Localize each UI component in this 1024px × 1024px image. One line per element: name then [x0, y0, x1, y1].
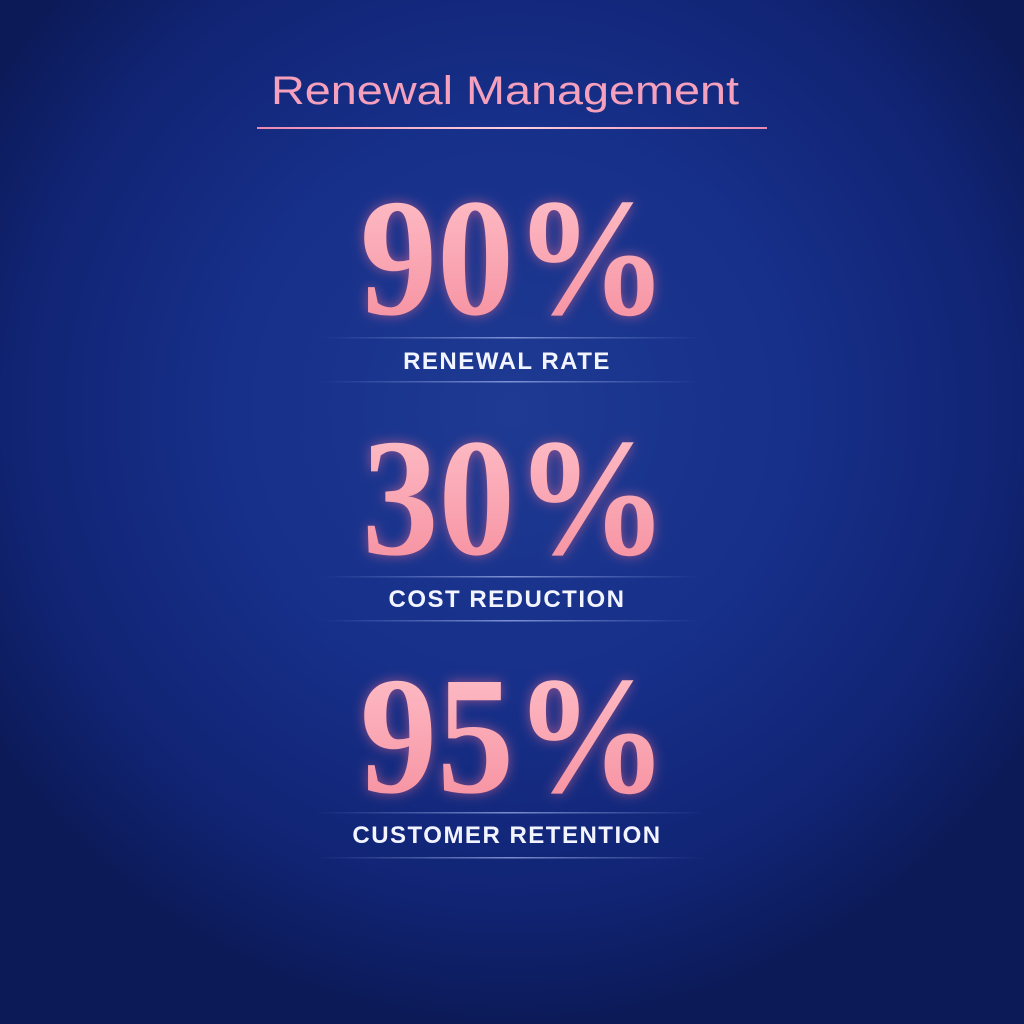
title: Renewal Management [271, 69, 739, 113]
stat: customer retention: 95% [360, 643, 668, 829]
stat: cost reduction: COST REDUCTION [388, 586, 626, 613]
stat: renewal rate: RENEWAL RATE [403, 348, 611, 375]
stat: cost reduction: 30% [362, 405, 668, 591]
stat: renewal rate: 90% [360, 165, 668, 351]
stat: customer retention: CUSTOMER RETENTION [352, 822, 662, 849]
